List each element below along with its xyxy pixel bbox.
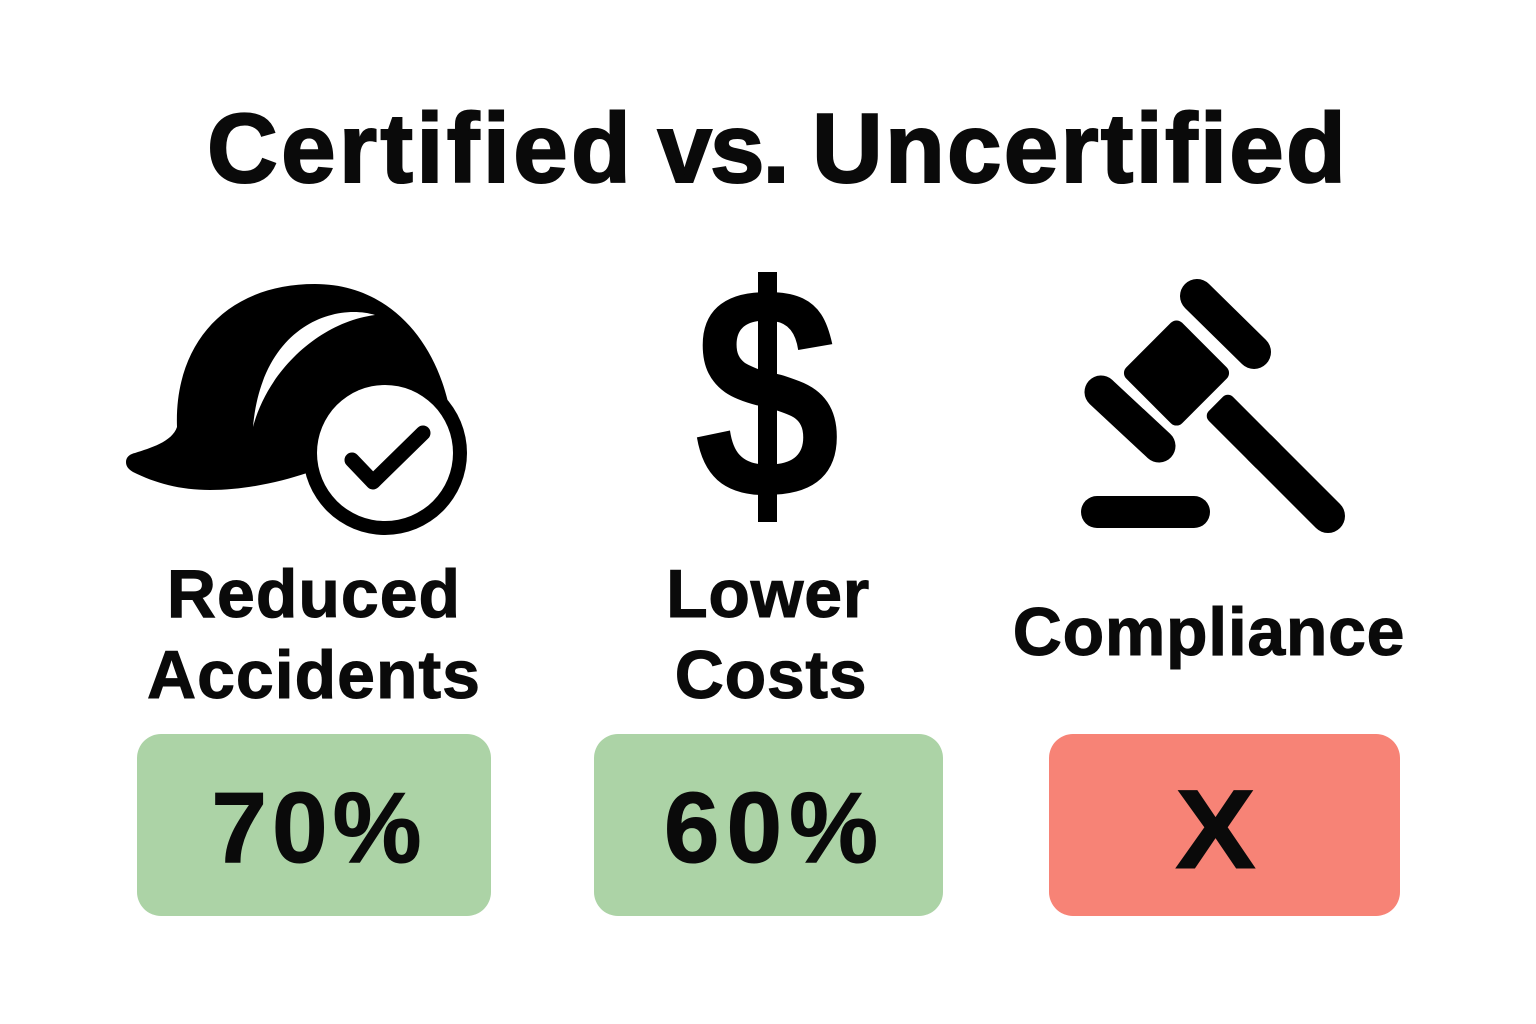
badge: X — [1049, 734, 1400, 916]
badge: 70%: 70% — [211, 772, 427, 884]
title — [207, 93, 1348, 203]
title: vs. — [658, 93, 788, 203]
label: lower costs: Lower — [666, 556, 870, 632]
label: compliance: Compliance — [1013, 594, 1405, 670]
label: lower costs — [666, 556, 870, 713]
label: reduced accidents — [147, 556, 481, 713]
icon: gavel — [1081, 296, 1328, 528]
badge: 60% — [594, 734, 943, 916]
icon: dollar sign: $ — [693, 224, 841, 563]
title: Certified — [207, 93, 634, 203]
label: lower costs: Costs — [675, 637, 867, 713]
label: reduced accidents: Accidents — [147, 637, 481, 713]
badge: 60%: 60% — [664, 772, 885, 884]
title: Uncertified — [812, 93, 1348, 203]
badge: X: X — [1175, 767, 1256, 892]
icon: hard hat with check — [126, 284, 467, 535]
label: reduced accidents: Reduced — [167, 556, 461, 632]
badge: 70% — [137, 734, 491, 916]
